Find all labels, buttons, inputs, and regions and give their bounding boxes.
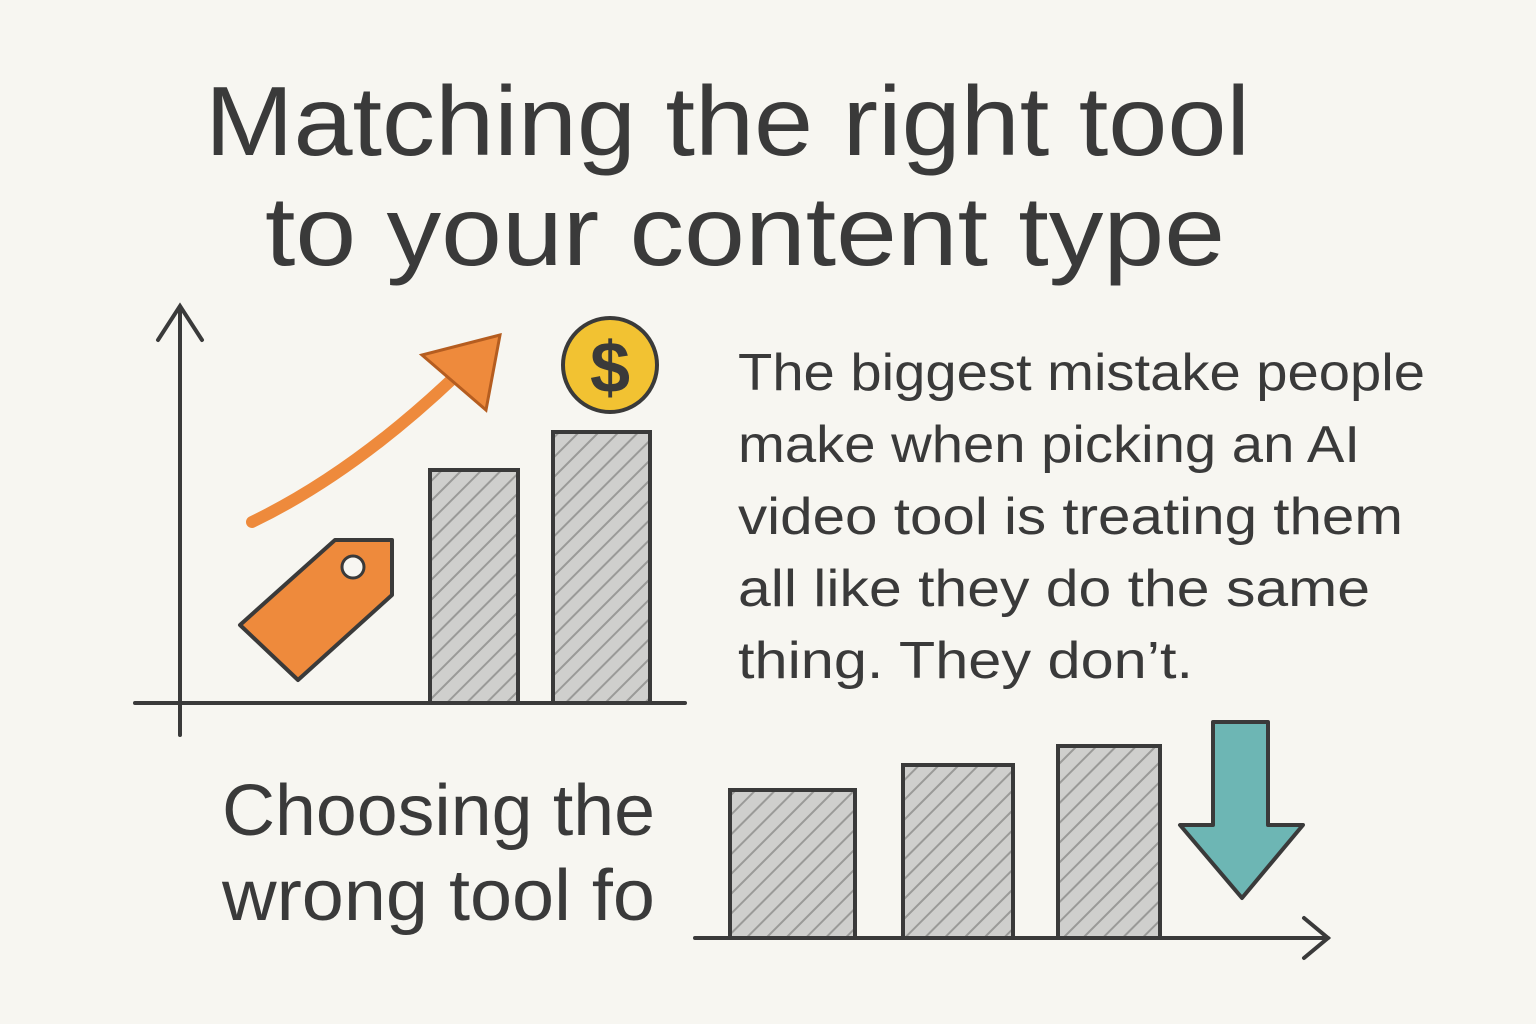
bar 3 <box>1058 746 1160 938</box>
arrow: teal down <box>1180 722 1303 898</box>
icon: dollar coin: $ <box>590 328 630 408</box>
icon: dollar coin <box>563 318 657 412</box>
title <box>205 66 1250 286</box>
chart: declining results <box>695 722 1328 958</box>
text block: wrong tool caption: Choosing the <box>222 771 655 851</box>
text block: main statement <box>738 344 1425 690</box>
text block: wrong tool caption <box>221 771 655 936</box>
bar 1 <box>430 470 518 703</box>
title: Matching the right tool <box>205 66 1250 176</box>
title: to your content type <box>265 176 1225 286</box>
x axis arrow <box>695 918 1328 958</box>
x axis <box>135 701 685 705</box>
icon: price tag <box>240 540 392 680</box>
text block: main statement: all like they do the same <box>738 560 1370 618</box>
text block: wrong tool caption: wrong tool fo <box>221 856 655 936</box>
arrow: orange trend <box>252 335 500 522</box>
text block: main statement: make when picking an AI <box>738 416 1360 474</box>
bar 2 <box>553 432 650 703</box>
chart: rising price <box>135 306 685 735</box>
text block: main statement: The biggest mistake people <box>738 344 1425 402</box>
bar 1 <box>730 790 855 938</box>
text block: main statement: thing. They don’t. <box>738 632 1193 690</box>
bar 2 <box>903 765 1013 938</box>
y axis arrow <box>158 306 202 735</box>
text block: main statement: video tool is treating them <box>738 488 1403 546</box>
